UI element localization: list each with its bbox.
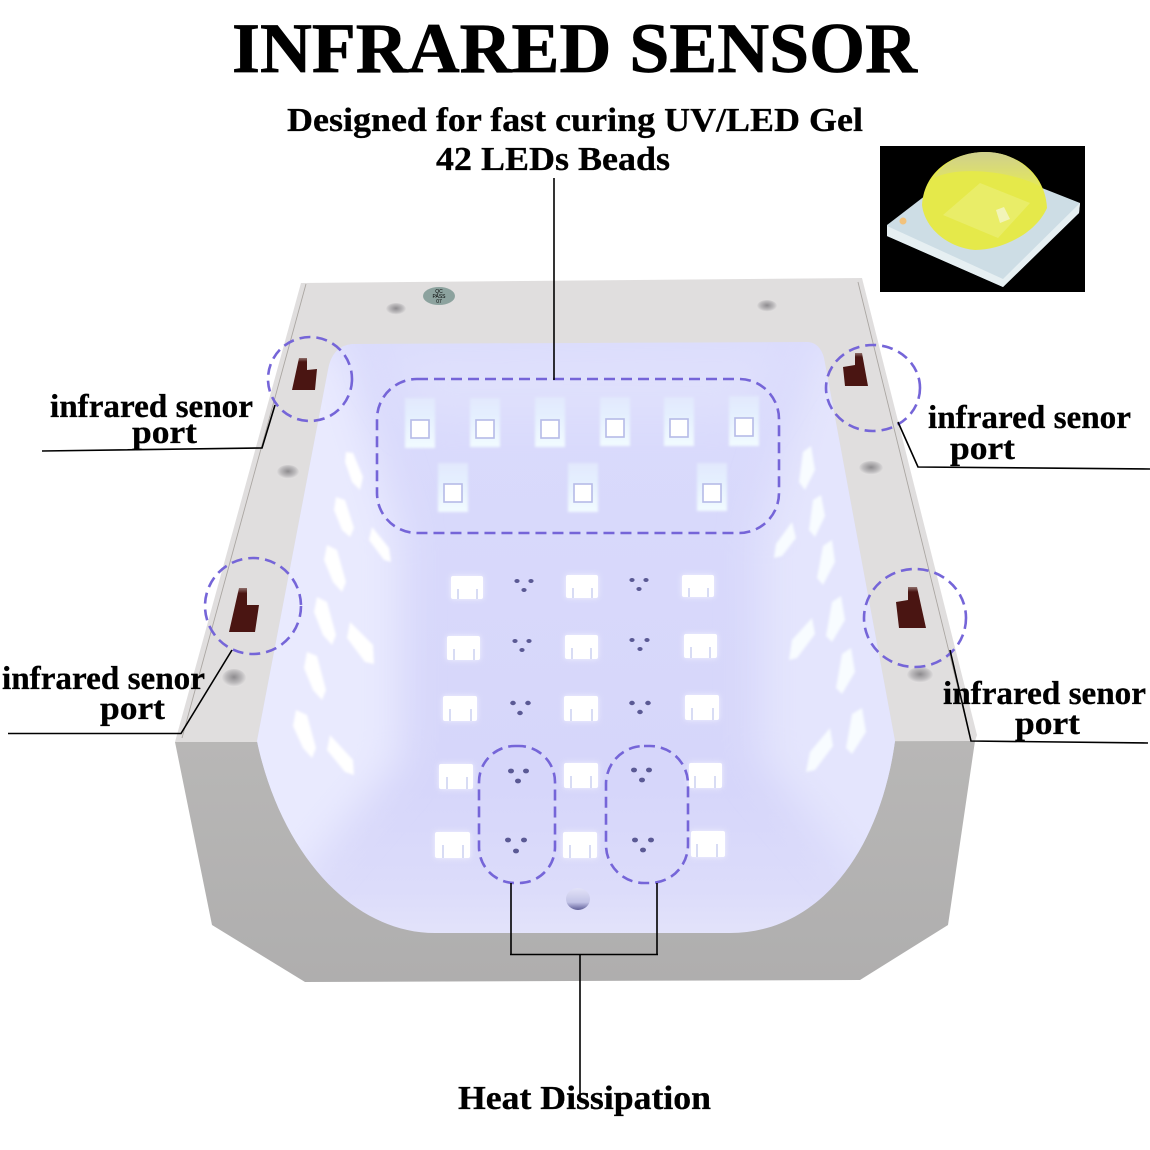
heat dissipation vent holes xyxy=(505,578,654,853)
label: top right port: port xyxy=(950,431,1015,467)
label: top right port xyxy=(928,400,1131,467)
back wall upper glow xyxy=(380,348,790,420)
QC pass sticker: QC xyxy=(435,289,443,295)
label: bottom right port: port xyxy=(1015,706,1080,742)
label: bottom left port: infrared senor xyxy=(2,661,205,697)
interior xyxy=(257,342,895,933)
QC pass sticker xyxy=(423,287,455,305)
label: top left port: infrared senor xyxy=(50,389,253,425)
label: bottom left port xyxy=(2,661,205,727)
lamp top rim xyxy=(175,278,977,742)
infrared sensor ports xyxy=(229,353,926,632)
floor LEDs xyxy=(435,575,725,858)
lamp front face xyxy=(175,741,975,982)
leader lines xyxy=(8,178,1150,1097)
label: top left port xyxy=(50,389,253,451)
rim seam lines xyxy=(182,282,970,738)
label: bottom right port xyxy=(943,676,1146,742)
LED bead photo xyxy=(880,146,1085,292)
label: bottom left port: port xyxy=(100,691,165,727)
title: INFRARED SENSOR xyxy=(232,10,918,88)
right side LEDs xyxy=(774,446,866,772)
label: bottom right port: infrared senor xyxy=(943,676,1146,712)
dashed highlight: vents left xyxy=(479,746,555,883)
label: heat dissipation: Heat Dissipation xyxy=(458,1080,711,1117)
bottom hole xyxy=(566,888,590,910)
left side LEDs xyxy=(293,452,391,775)
dashed highlight: back wall LEDs xyxy=(377,379,779,533)
right side wall xyxy=(762,374,895,866)
rim screw holes xyxy=(222,300,933,687)
back wall LEDs xyxy=(405,396,759,512)
subtitle: designed for fast curing: Designed for fast curing UV/LED Gel xyxy=(287,102,863,139)
subtitle: 42 LED beads: 42 LEDs Beads xyxy=(436,141,670,178)
QC pass sticker: 07 xyxy=(436,299,442,305)
left side wall xyxy=(257,356,404,866)
QC pass sticker: PASS xyxy=(433,294,446,300)
label: top right port: infrared senor xyxy=(928,400,1131,436)
lamp body xyxy=(175,278,977,982)
dashed highlight: vents right xyxy=(606,746,688,883)
label: top left port: port xyxy=(132,415,197,451)
dashed highlight circles on ports xyxy=(205,337,966,667)
